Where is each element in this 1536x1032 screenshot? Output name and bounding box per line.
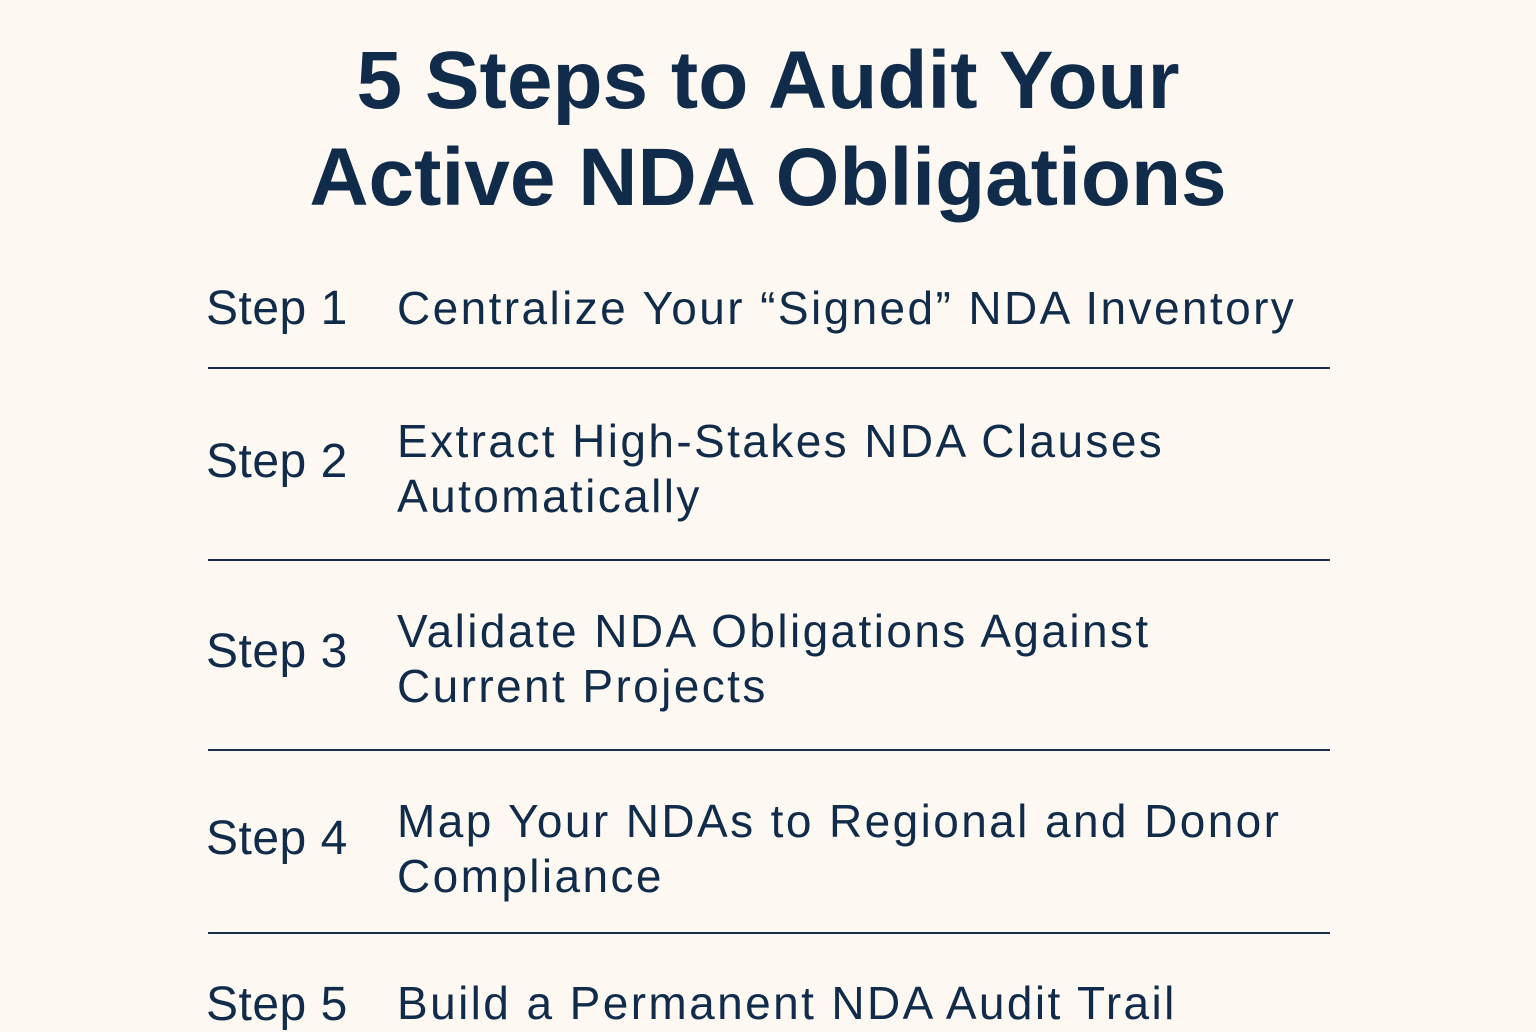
step 4 text: [397, 795, 1281, 902]
step 4 label: Step 4: [206, 812, 348, 865]
step 5 text: Build a Permanent NDA Audit Trail: [397, 977, 1177, 1029]
step 2 label: Step 2: [206, 435, 348, 488]
step 3 text: Validate NDA Obligations Against: [397, 605, 1151, 657]
step 4 text: Map Your NDAs to Regional and Donor: [397, 795, 1281, 847]
step 5: [206, 977, 1177, 1031]
step 4 text: Compliance: [397, 850, 664, 902]
step 5 label: Step 5: [206, 978, 348, 1031]
title: 5 Steps to Audit Your: [356, 35, 1180, 126]
step 1 label: Step 1: [206, 282, 348, 335]
step 3 text: [397, 605, 1151, 712]
step 2 text: Extract High-Stakes NDA Clauses: [397, 415, 1164, 467]
step 2: [206, 415, 1164, 522]
step 3: [206, 605, 1151, 712]
step 2 text: [397, 415, 1164, 522]
title: Active NDA Obligations: [309, 132, 1227, 223]
title: [309, 35, 1227, 223]
step 1 text: Centralize Your “Signed” NDA Inventory: [397, 282, 1296, 334]
step 2 text: Automatically: [397, 470, 702, 522]
step 3 text: Current Projects: [397, 660, 768, 712]
step 4: [206, 795, 1281, 902]
step 1: [206, 282, 1296, 335]
step 3 label: Step 3: [206, 625, 348, 678]
